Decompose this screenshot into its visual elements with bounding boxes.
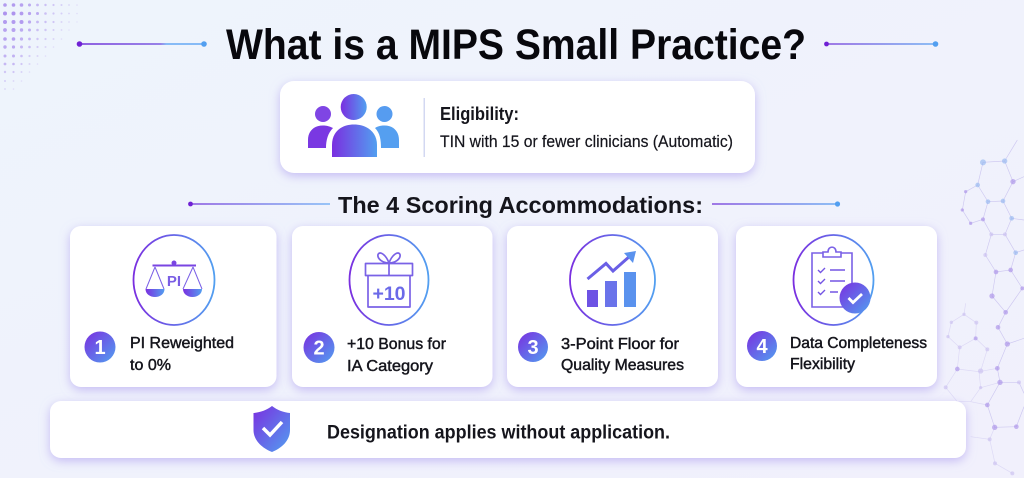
panel: card 2: [292, 226, 492, 387]
badge: 1: [84, 332, 116, 362]
icon: rising bar chart: [570, 235, 655, 325]
label: PI reweighted: PI Reweighted: [130, 335, 234, 352]
label: floor: Quality Measures: [561, 357, 684, 374]
panel: eligibility: [280, 81, 755, 173]
subheading divider: right: [712, 201, 840, 207]
badge: 4: 4: [756, 336, 768, 358]
label: data completeness: Flexibility: [790, 356, 855, 373]
icon: gift box: +10: [372, 283, 406, 305]
icon: group of people: [308, 94, 399, 157]
heading: eligibility: Eligibility:: [440, 104, 519, 124]
label: bonus: +10 Bonus for: [347, 336, 447, 353]
icon: shield with check: [254, 406, 290, 452]
label: floor: 3-Point Floor for: [561, 336, 680, 353]
badge: 3: [518, 332, 548, 362]
panel: card 3: [507, 226, 718, 387]
panel: card 1: [70, 226, 276, 387]
badge: 2: 2: [313, 338, 325, 360]
label: data completeness: Data Completeness: [790, 335, 927, 352]
subheading divider: left: [188, 202, 330, 206]
badge: 2: [304, 332, 334, 363]
label: bonus: IA Category: [347, 358, 433, 375]
title divider: left: [77, 41, 207, 47]
icon: balance scale: [134, 235, 214, 325]
badge: 4: [747, 331, 777, 361]
title divider: right: [824, 41, 938, 47]
icon: gift box: [350, 235, 428, 325]
divider: [424, 98, 425, 157]
icon: balance scale: PI: [167, 273, 181, 290]
title: What is a MIPS Small Practice?: [226, 21, 806, 69]
badge: 3: 3: [527, 337, 539, 359]
icon: clipboard with check: [794, 235, 874, 325]
molecular network: right side: [944, 140, 1024, 475]
dot pattern: top left: [3, 3, 78, 90]
subheading: The 4 Scoring Accommodations:: [338, 192, 703, 218]
label: PI reweighted: to 0%: [130, 357, 171, 374]
text: eligibility detail: TIN with 15 or fewer clinicians (Automatic): [440, 132, 733, 151]
panel: designation banner: [50, 401, 966, 458]
badge: 1: 1: [94, 337, 106, 359]
text: designation: Designation applies without application.: [327, 422, 670, 444]
panel: card 4: [736, 226, 937, 387]
